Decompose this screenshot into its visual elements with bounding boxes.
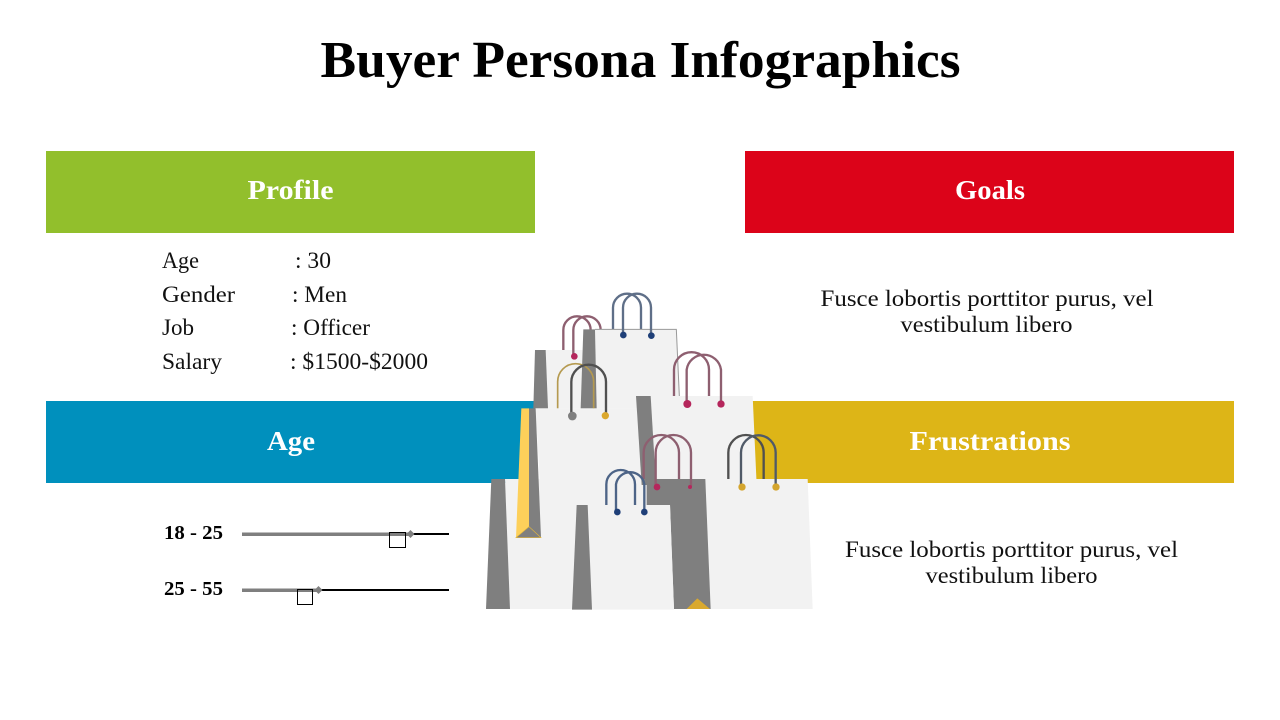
frustrations text [845, 537, 1178, 588]
bag: back left [533, 316, 601, 408]
profile header: Profile [248, 175, 334, 205]
panel: profile [46, 151, 535, 374]
title: Buyer Persona Infographics [320, 32, 960, 89]
frustrations text: Fusce lobortis porttitor purus, vel [845, 537, 1178, 562]
profile details [162, 248, 428, 374]
profile details: Salary [162, 349, 223, 374]
goals header [745, 151, 1234, 233]
frustrations text: vestibulum libero [926, 563, 1098, 588]
slider: 25-55: 25 - 55 [164, 578, 223, 600]
panel: frustrations [745, 401, 1234, 588]
frustrations header [745, 401, 1234, 483]
slider: 18-25 [164, 522, 449, 548]
profile details: : Men [292, 282, 347, 307]
profile details: Gender [162, 282, 235, 307]
panel: goals [745, 151, 1234, 337]
illustration: shopping bags [486, 294, 813, 610]
slider: 25-55 [164, 578, 449, 604]
bag: bottom front [572, 470, 674, 610]
profile details: : Officer [291, 315, 370, 340]
bag: back top [581, 294, 680, 408]
profile header [46, 151, 535, 233]
goals text: Fusce lobortis porttitor purus, vel [820, 286, 1154, 311]
bag: bottom right [644, 435, 813, 609]
profile details: : 30 [295, 248, 331, 273]
age header: Age [267, 426, 315, 456]
profile details: Age [162, 248, 199, 273]
goals header: Goals [955, 175, 1025, 205]
bag: right middle [636, 352, 757, 485]
age header [46, 401, 535, 483]
profile details: Job [162, 315, 194, 340]
panel: age [46, 401, 535, 604]
frustrations header: Frustrations [910, 426, 1070, 456]
bag: bottom left [486, 479, 647, 609]
slider: 18-25: 18 - 25 [164, 522, 223, 544]
profile details: : $1500-$2000 [290, 349, 428, 374]
bag: yellow [516, 364, 643, 538]
goals text: vestibulum libero [900, 312, 1072, 337]
goals text [820, 286, 1154, 337]
